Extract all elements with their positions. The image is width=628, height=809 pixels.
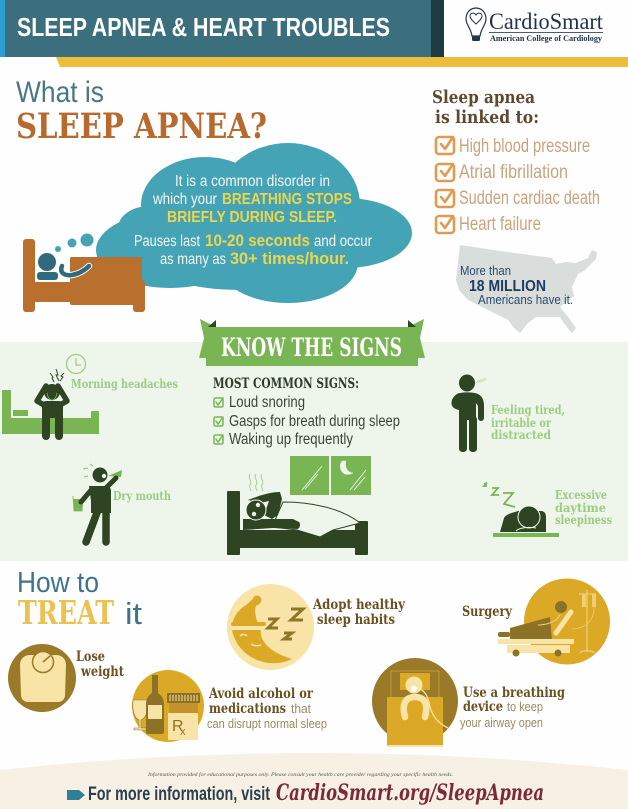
map: United States statistic: Americans have it. bbox=[478, 292, 573, 307]
sign: feeling tired: YAWN bbox=[475, 376, 487, 385]
list: most common signs bbox=[213, 376, 400, 448]
sign: excessive daytime sleepiness bbox=[484, 483, 612, 537]
header banner bbox=[0, 0, 628, 67]
treatment: surgery: Surgery bbox=[462, 604, 513, 620]
cloud callout: BREATHING STOPS bbox=[222, 191, 352, 208]
sign: dry mouth: Dry mouth bbox=[113, 489, 171, 503]
banner: know the signs: KNOW THE SIGNS bbox=[221, 333, 402, 362]
list: most common signs: Gasps for breath during sleep bbox=[229, 413, 400, 430]
icon: person sleeping in bed bbox=[23, 234, 145, 312]
title: SLEEP APNEA & HEART TROUBLES bbox=[17, 12, 390, 42]
sign: morning headaches: Morning headaches bbox=[71, 377, 178, 391]
panel: linked conditions: is linked to: bbox=[435, 107, 539, 128]
treatment: avoid alcohol or medications: R bbox=[172, 718, 184, 735]
cloud callout: as many as bbox=[160, 251, 226, 268]
footer: CardioSmart.org/SleepApnea bbox=[276, 780, 544, 806]
treatment: breathing device: device bbox=[463, 699, 503, 715]
cloud callout: and occur bbox=[314, 233, 373, 250]
cloud callout: which your bbox=[152, 191, 218, 208]
panel: linked conditions bbox=[432, 87, 600, 235]
panel: know the signs background bbox=[0, 342, 628, 561]
map: United States statistic bbox=[456, 245, 597, 333]
sign: feeling tired: Feeling tired, bbox=[491, 403, 565, 417]
cloud callout: BRIEFLY DURING SLEEP. bbox=[167, 209, 337, 226]
list: most common signs: Loud snoring bbox=[229, 394, 305, 411]
cloud callout: Pauses last bbox=[134, 233, 200, 250]
footer bbox=[0, 753, 628, 809]
logo: CardioSmart: American College of Cardiology bbox=[490, 34, 602, 43]
heading: What is Sleep Apnea bbox=[16, 76, 267, 147]
panel: linked conditions: Atrial fibrillation bbox=[459, 162, 568, 183]
sign: excessive daytime sleepiness: sleepiness bbox=[555, 513, 612, 527]
treatment: avoid alcohol or medications: medications bbox=[209, 701, 286, 717]
sign: feeling tired: distracted bbox=[491, 428, 552, 442]
map: United States statistic: More than bbox=[460, 263, 511, 278]
heading: How to treat it: How to bbox=[17, 567, 99, 599]
footer: For more information, visit bbox=[88, 784, 270, 805]
banner: know the signs bbox=[199, 319, 425, 366]
logo: CardioSmart: CardioSmart bbox=[489, 9, 604, 34]
treatment: breathing device bbox=[372, 658, 565, 747]
cloud callout bbox=[96, 143, 412, 303]
treatment: breathing device: Use a breathing bbox=[463, 685, 565, 701]
heading: How to treat it bbox=[17, 567, 142, 632]
treatment: sleep habits: Adopt healthy bbox=[312, 597, 406, 613]
sign: morning headaches bbox=[2, 354, 178, 436]
logo: CardioSmart bbox=[466, 8, 604, 43]
cloud callout: It is a common disorder in bbox=[175, 173, 330, 190]
icon: person in bed at night bbox=[227, 456, 371, 555]
list: most common signs: Waking up frequently bbox=[229, 431, 353, 448]
treatment: breathing device: your airway open bbox=[460, 715, 543, 730]
treatment: sleep habits: sleep habits bbox=[317, 612, 395, 628]
panel: linked conditions: High blood pressure bbox=[459, 136, 590, 157]
treatment: avoid alcohol or medications: can disrupt normal sleep bbox=[207, 716, 327, 731]
treatment: lose weight: weight bbox=[80, 664, 124, 680]
treatment: surgery bbox=[462, 578, 610, 664]
treatment: lose weight bbox=[8, 644, 124, 712]
heading: What is Sleep Apnea: SLEEP APNEA? bbox=[16, 106, 267, 147]
sign: feeling tired: irritable or bbox=[491, 416, 552, 430]
footer: Information provided for educational purposes only. Please consult your health care provider regarding your specific health needs. bbox=[147, 773, 453, 778]
heading: How to treat it: TREAT bbox=[18, 593, 114, 632]
treatment: avoid alcohol or medications: x bbox=[180, 726, 186, 738]
treatment: breathing device: to keep bbox=[507, 699, 543, 714]
sign: dry mouth bbox=[73, 464, 171, 542]
sign: excessive daytime sleepiness: Excessive bbox=[555, 488, 607, 502]
sign: feeling tired bbox=[451, 374, 565, 452]
heading: How to treat it: it bbox=[125, 596, 142, 631]
treatment: lose weight: Lose bbox=[76, 649, 105, 665]
sign: excessive daytime sleepiness: daytime bbox=[555, 501, 606, 515]
treatment: avoid alcohol or medications: Avoid alcohol or bbox=[208, 686, 314, 702]
list: most common signs: MOST COMMON SIGNS: bbox=[213, 376, 359, 392]
panel: linked conditions: Heart failure bbox=[459, 214, 541, 235]
heading: What is Sleep Apnea: What is bbox=[16, 76, 104, 109]
cloud callout: 30+ times/hour. bbox=[230, 249, 349, 268]
treatment: sleep habits bbox=[227, 584, 406, 670]
treatment: avoid alcohol or medications: that bbox=[291, 701, 311, 716]
map: United States statistic: 18 MILLION bbox=[469, 278, 546, 295]
cloud callout: 10-20 seconds bbox=[205, 231, 310, 250]
treatment: avoid alcohol or medications bbox=[132, 670, 327, 742]
panel: linked conditions: Sleep apnea bbox=[432, 87, 535, 108]
